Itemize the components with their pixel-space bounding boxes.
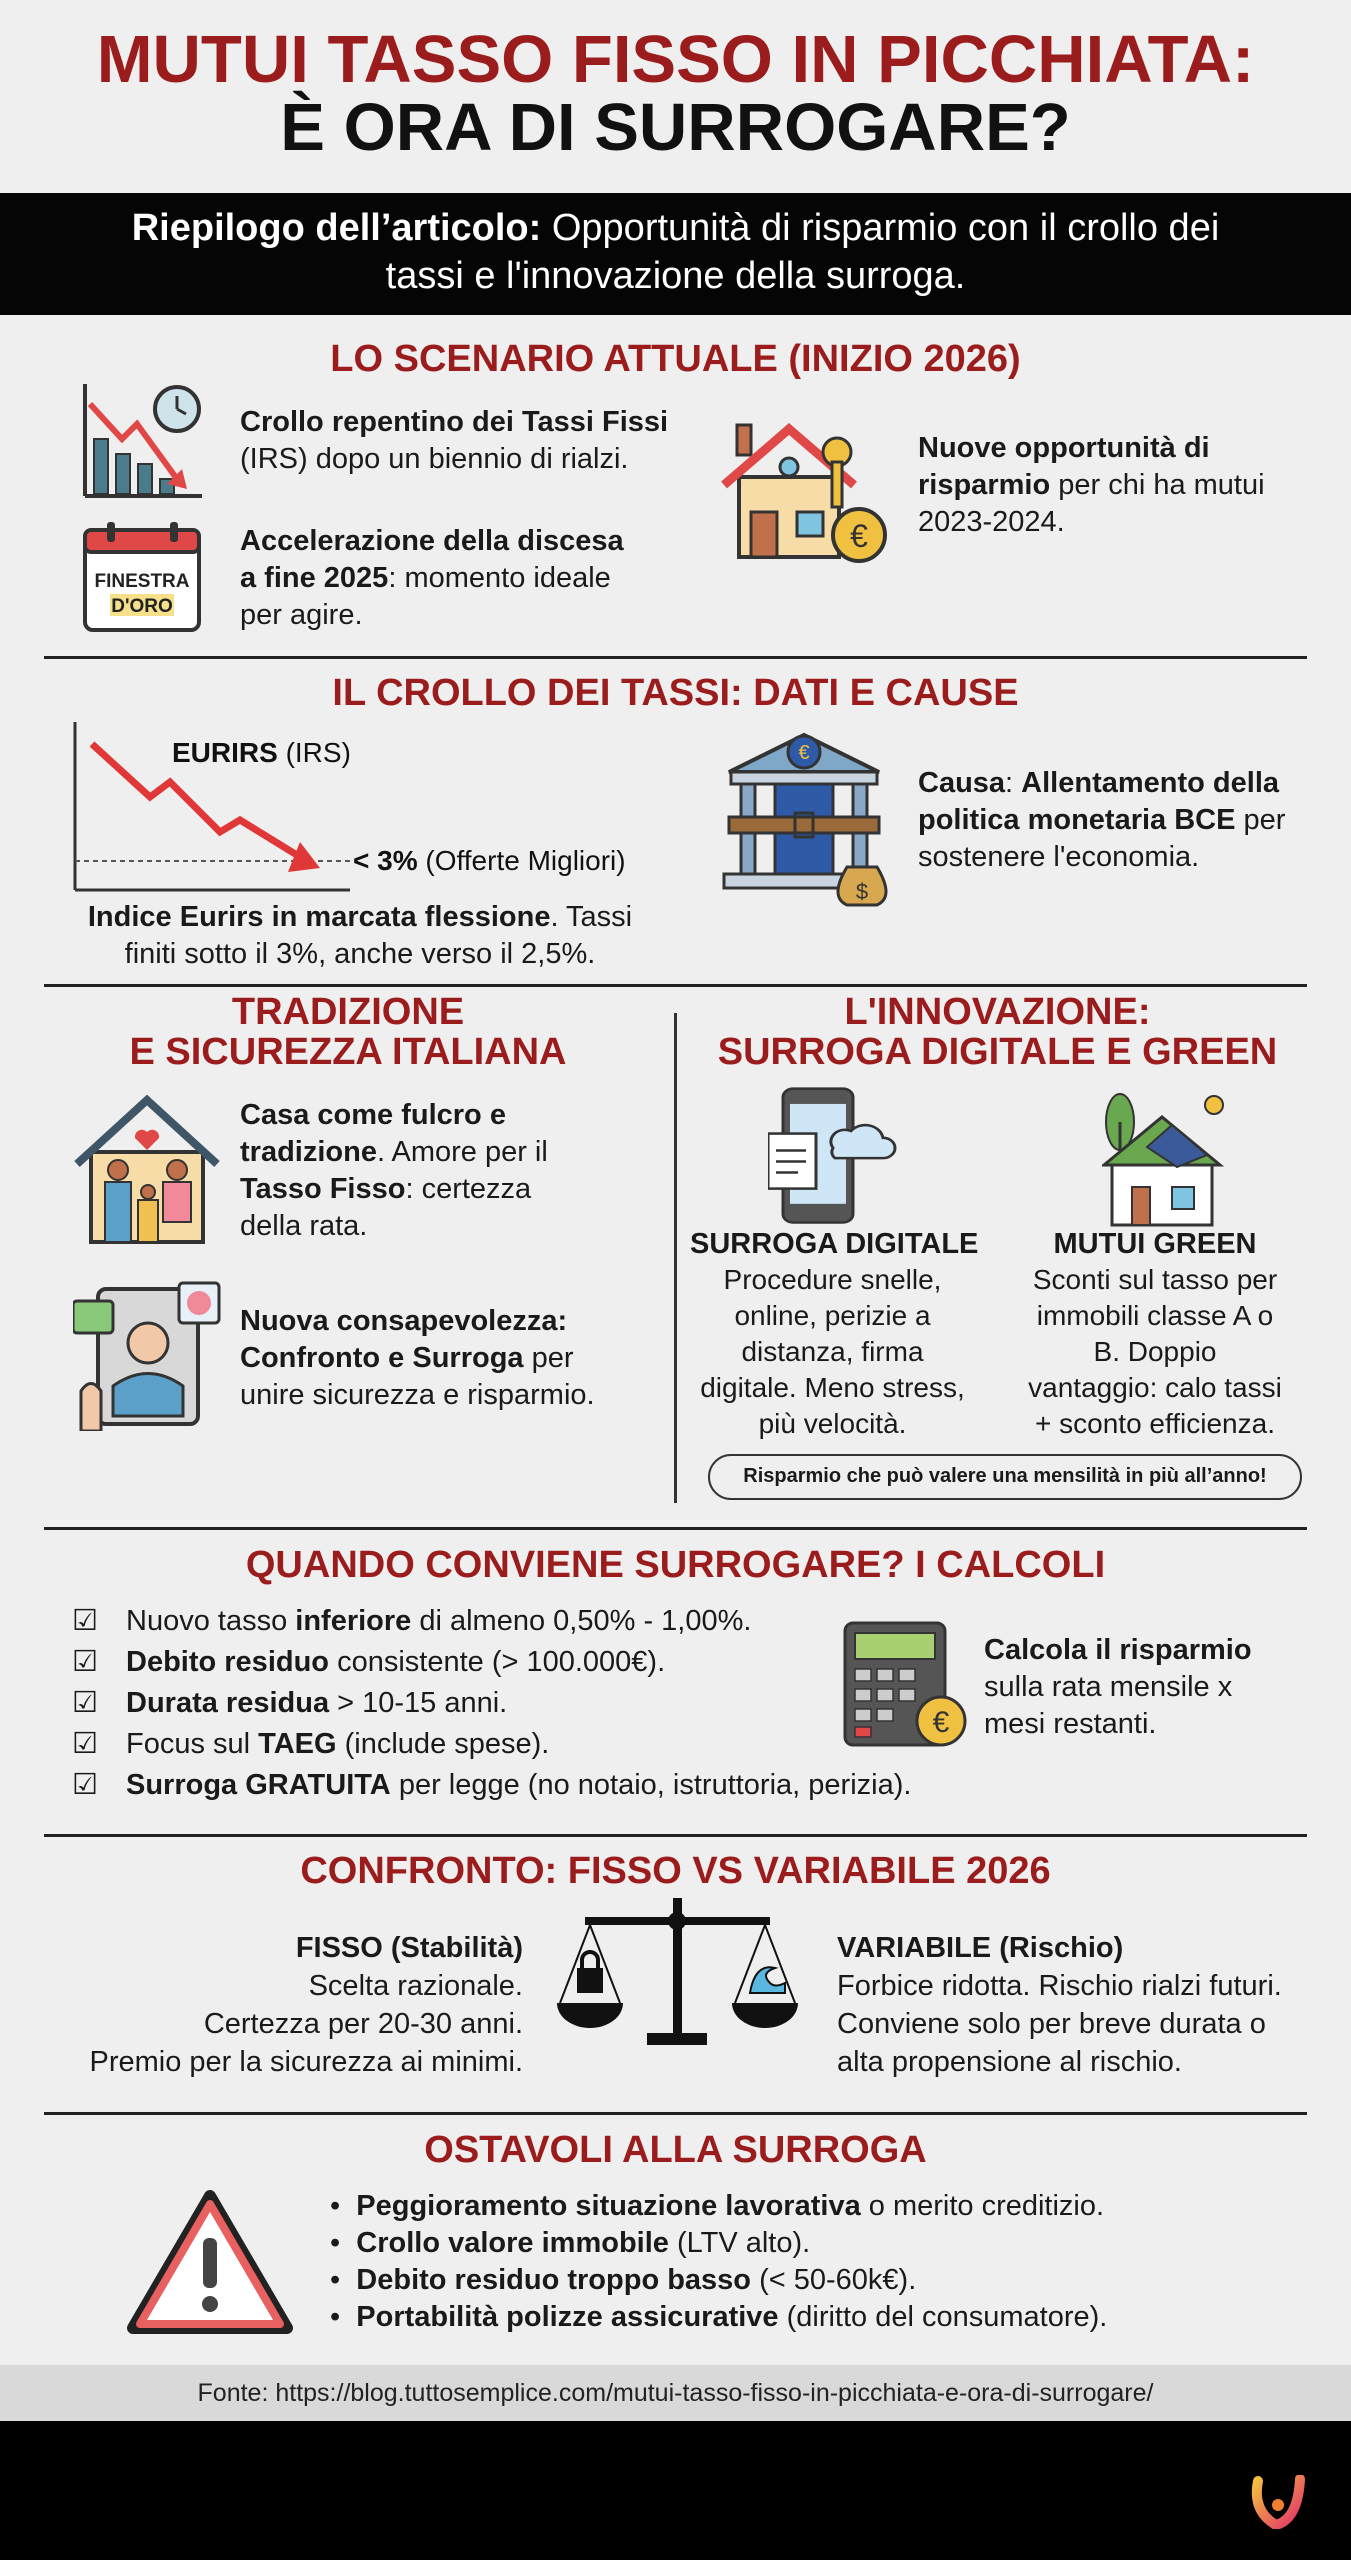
icon: scale	[557, 1898, 798, 2045]
heading: confronto: CONFRONTO: FISSO VS VARIABILE 2026	[300, 1850, 1051, 1892]
text: surroga digitale: Procedure snelle,	[724, 1264, 941, 1295]
text: nuove opportunita: 2023-2024.	[918, 506, 1065, 538]
icon: bank with belt: $	[856, 879, 868, 904]
icon: calendar	[83, 522, 201, 632]
text: fisso	[89, 1932, 523, 2078]
chart: eurirs decline: EURIRS (IRS)	[172, 737, 351, 768]
icon: calculator	[844, 1622, 966, 1746]
checklist: ☑	[72, 1687, 98, 1719]
text: causa: sostenere l'economia.	[918, 841, 1199, 873]
text: variabile: alta propensione al rischio.	[837, 2046, 1182, 2078]
text: accelerazione	[240, 525, 624, 631]
icon: bank with belt	[722, 732, 888, 906]
heading: innovazione: L'INNOVAZIONE:	[844, 991, 1150, 1033]
heading: tradizione: E SICUREZZA ITALIANA	[130, 1031, 566, 1073]
checklist: ☑	[72, 1728, 98, 1760]
text: consapevolezza	[240, 1305, 595, 1411]
checklist: Focus sul TAEG (include spese).	[126, 1728, 549, 1760]
text: fisso: FISSO (Stabilità)	[296, 1932, 523, 1964]
text: surroga digitale: digitale. Meno stress,	[700, 1372, 965, 1403]
text: crollo: Crollo repentino dei Tassi Fissi	[240, 406, 668, 438]
text: mutui green: Sconti sul tasso per	[1033, 1264, 1277, 1295]
bullet list: ostavoli: • Debito residuo troppo basso (< 50-60k€).	[330, 2264, 916, 2296]
footer black band	[0, 2421, 1351, 2560]
checklist	[72, 1605, 911, 1801]
chart: eurirs decline: < 3% (Offerte Migliori)	[353, 845, 626, 876]
text: mutui green: + sconto efficienza.	[1035, 1408, 1275, 1439]
text: surroga digitale: più velocità.	[759, 1408, 906, 1439]
icon: person tablet	[73, 1282, 220, 1431]
text: crollo: (IRS) dopo un biennio di rialzi.	[240, 443, 628, 475]
heading: crollo tassi: IL CROLLO DEI TASSI: DATI E CAUSE	[332, 672, 1019, 714]
text: causa: politica monetaria BCE per	[918, 804, 1285, 836]
icon: house with key and coin: €	[850, 518, 868, 554]
heading: quando conviene: QUANDO CONVIENE SURROGARE? I CALCOLI	[246, 1544, 1105, 1586]
icon: warning	[127, 2190, 293, 2334]
logo	[1252, 2475, 1305, 2529]
text: surroga digitale	[690, 1228, 978, 1439]
text: fisso: Certezza per 20-30 anni.	[204, 2008, 523, 2040]
text: calcola: Calcola il risparmio	[984, 1634, 1252, 1666]
title: MUTUI TASSO FISSO IN PICCHIATA:	[97, 22, 1254, 97]
checklist: ☑	[72, 1769, 98, 1801]
text: accelerazione: per agire.	[240, 599, 363, 631]
icon: phone cloud	[768, 1087, 896, 1224]
text: casa: tradizione. Amore per il	[240, 1136, 548, 1168]
heading: innovazione: SURROGA DIGITALE E GREEN	[718, 1031, 1277, 1073]
text: variabile: Conviene solo per breve durata o	[837, 2008, 1266, 2040]
callout pill: Risparmio che può valere una mensilità in più all’anno!	[743, 1465, 1267, 1487]
title: È ORA DI SURROGARE?	[280, 90, 1071, 165]
footer source: Fonte: https://blog.tuttosemplice.com/mutui-tasso-fisso-in-picchiata-e-ora-di-surrogare/	[198, 2379, 1153, 2407]
checklist: Nuovo tasso inferiore di almeno 0,50% - 1,00%.	[126, 1605, 751, 1637]
text: indice eurirs	[88, 901, 632, 970]
heading: scenario: LO SCENARIO ATTUALE (INIZIO 2026)	[330, 338, 1021, 380]
icon: calendar: FINESTRA	[94, 571, 190, 592]
text: causa	[918, 767, 1285, 873]
text: nuove opportunita: Nuove opportunità di	[918, 432, 1210, 464]
text: consapevolezza: unire sicurezza e risparmio.	[240, 1379, 595, 1411]
heading: tradizione: TRADIZIONE	[232, 991, 464, 1033]
text: causa: Causa: Allentamento della	[918, 767, 1279, 799]
text: variabile: Forbice ridotta. Rischio rialzi futuri.	[837, 1970, 1282, 2002]
icon: family house	[74, 1094, 220, 1244]
text: calcola: mesi restanti.	[984, 1708, 1156, 1740]
text: surroga digitale: online, perizie a	[734, 1300, 931, 1331]
bullet list: ostavoli	[330, 2190, 1107, 2333]
summary banner: Riepilogo dell’articolo: Opportunità di risparmio con il crollo dei	[132, 207, 1219, 249]
text: consapevolezza: Nuova consapevolezza:	[240, 1305, 567, 1337]
panel: tradizione	[73, 991, 595, 1431]
text: indice eurirs: Indice Eurirs in marcata flessione. Tassi	[88, 901, 632, 933]
text: mutui green: B. Doppio	[1094, 1336, 1216, 1367]
text: casa: Casa come fulcro e	[240, 1099, 506, 1131]
checklist: Durata residua > 10-15 anni.	[126, 1687, 507, 1719]
text: fisso: Premio per la sicurezza ai minimi.	[89, 2046, 523, 2078]
text: surroga digitale: SURROGA DIGITALE	[690, 1228, 978, 1260]
bullet list: ostavoli: • Portabilità polizze assicurative (diritto del consumatore).	[330, 2301, 1107, 2333]
text: accelerazione: Accelerazione della discesa	[240, 525, 624, 557]
text: surroga digitale: distanza, firma	[741, 1336, 924, 1367]
icon: bank with belt: €	[798, 742, 810, 764]
text: casa: della rata.	[240, 1210, 367, 1242]
text: mutui green	[1028, 1228, 1282, 1439]
panel: innovazione	[690, 991, 1302, 1500]
icon: falling chart	[83, 384, 202, 498]
text: casa	[240, 1099, 548, 1242]
icon: calculator: €	[933, 1706, 950, 1739]
icon: green house	[1102, 1093, 1224, 1226]
title	[97, 22, 1254, 165]
callout pill	[708, 1454, 1302, 1500]
heading: tradizione	[130, 991, 566, 1073]
text: variabile: VARIABILE (Rischio)	[837, 1932, 1123, 1964]
footer source	[0, 2365, 1351, 2421]
text: calcola: sulla rata mensile x	[984, 1671, 1232, 1703]
bullet list: ostavoli: • Peggioramento situazione lavorativa o merito creditizio.	[330, 2190, 1104, 2222]
checklist: Surroga GRATUITA per legge (no notaio, istruttoria, perizia).	[126, 1769, 911, 1801]
checklist: ☑	[72, 1605, 98, 1637]
text: crollo	[240, 406, 668, 475]
heading: ostavoli: OSTAVOLI ALLA SURROGA	[424, 2129, 927, 2171]
text: consapevolezza: Confronto e Surroga per	[240, 1342, 574, 1374]
text: mutui green: MUTUI GREEN	[1054, 1228, 1256, 1260]
text: mutui green: immobili classe A o	[1037, 1300, 1273, 1331]
text: mutui green: vantaggio: calo tassi	[1028, 1372, 1282, 1403]
checklist: Debito residuo consistente (> 100.000€).	[126, 1646, 665, 1678]
chart: eurirs decline	[74, 722, 626, 892]
icon: house with key and coin	[721, 423, 887, 563]
icon: calendar: D'ORO	[111, 596, 173, 617]
summary banner: tassi e l'innovazione della surroga.	[386, 255, 965, 297]
divider vertical	[674, 1013, 677, 1503]
text: nuove opportunita	[918, 432, 1265, 538]
heading: innovazione	[718, 991, 1277, 1073]
text: casa: Tasso Fisso: certezza	[240, 1173, 531, 1205]
text: nuove opportunita: risparmio per chi ha mutui	[918, 469, 1265, 501]
summary banner	[0, 193, 1351, 315]
text: accelerazione: a fine 2025: momento ideale	[240, 562, 611, 594]
text: variabile	[837, 1932, 1282, 2078]
text: indice eurirs: finiti sotto il 3%, anche verso il 2,5%.	[125, 938, 595, 970]
text: calcola	[984, 1634, 1252, 1740]
text: fisso: Scelta razionale.	[309, 1970, 523, 2002]
bullet list: ostavoli: • Crollo valore immobile (LTV alto).	[330, 2227, 810, 2259]
checklist: ☑	[72, 1646, 98, 1678]
